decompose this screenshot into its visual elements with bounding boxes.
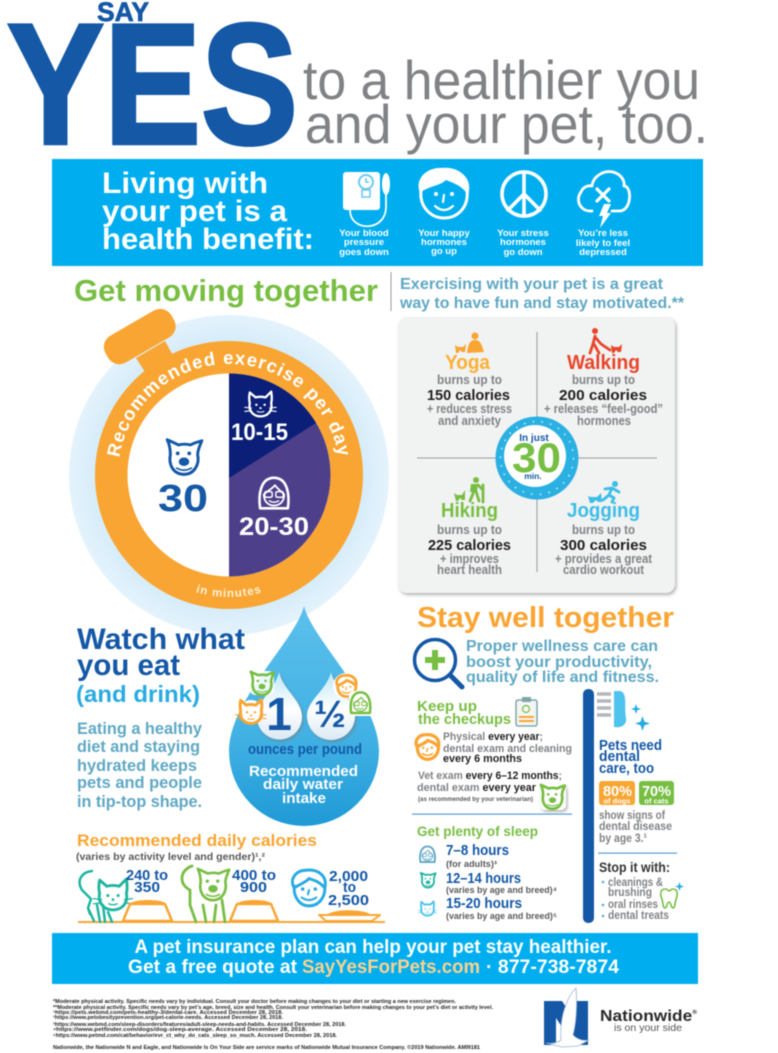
- footnotes: **Moderate physical activity. Specific needs vary by pet’s age, breed, size and health. Consult your veterinarian before making changes to your pet’s diet or activity level.: [53, 1005, 494, 1011]
- icon: cat badge: [236, 700, 266, 724]
- activity: hiking: [428, 477, 511, 577]
- stopwatch handle: [99, 304, 180, 380]
- benefit labels: Your blood: [339, 228, 389, 239]
- footnotes: *Moderate physical activity. Specific needs vary by individual. Consult your doctor before making changes to your diet or starting a new exercise regimen.: [53, 999, 457, 1005]
- sub-heading: pets need dental care: [599, 738, 662, 777]
- calories: person: [328, 868, 369, 909]
- activity: hiking: Hiking: [441, 500, 498, 522]
- sleep: adults: 7–8 hours: [446, 842, 509, 859]
- person value: [239, 478, 309, 541]
- water caption: daily water: [263, 776, 343, 793]
- sub-heading: keep up the checkups: [417, 698, 511, 728]
- text: pet checkups: [417, 770, 562, 803]
- title: line two: and your pet, too.: [305, 93, 708, 155]
- calories: dog: [232, 867, 276, 896]
- sleep: adults: (for adults)³: [446, 859, 497, 869]
- chart: exercise stopwatch: [68, 308, 390, 635]
- list: dental care: oral rinses: [608, 899, 658, 911]
- section: watch what you eat: [76, 623, 245, 811]
- icon: peace sign: [502, 172, 546, 216]
- benefit labels: pressure: [344, 237, 384, 248]
- activity: jogging: burns up to: [572, 522, 635, 537]
- stat: 80 percent of dogs: 80%: [603, 783, 632, 800]
- icon: yoga: [455, 332, 484, 353]
- dog value: 30: [158, 478, 208, 520]
- icon: person checkups: [416, 735, 439, 759]
- small drop: pets: [257, 672, 302, 740]
- activity: hiking: heart health: [437, 563, 502, 577]
- badge: in just 30 min: min.: [524, 471, 542, 481]
- activity: yoga: and anxiety: [438, 414, 501, 428]
- segment: cat: [229, 374, 316, 478]
- logo wordmark: Nationwide: [600, 1008, 685, 1025]
- illustration: cat with bowl: [80, 871, 172, 922]
- list: dental care: dental treats: [608, 910, 669, 922]
- text: human checkups: every 6 months: [443, 753, 522, 765]
- icon: jogging: [588, 481, 619, 503]
- footnotes: ⁵https://www.petmd.com/cat/behavior/evr_ct_why_do_cats_sleep_so_much. Accessed December 28, 2018.: [53, 1033, 338, 1039]
- person value: 20-30: [239, 513, 309, 541]
- heading: watch what you eat: you eat: [77, 649, 180, 682]
- sub-heading: pets need dental care: Pets need: [599, 738, 662, 754]
- diet paragraph: pets and people: [77, 773, 202, 792]
- panel: health benefits band: [52, 159, 703, 266]
- activity: walking: Walking: [567, 352, 640, 374]
- ring title: Recommended exercise per day: [106, 350, 349, 458]
- wellness intro: [466, 638, 659, 686]
- text: dental disease: dental disease: [599, 819, 672, 833]
- calories: person: 2,500: [328, 892, 369, 909]
- sleep: cats: (varies by age and breed)⁵: [446, 911, 557, 921]
- benefit labels: [339, 228, 630, 258]
- sleep: cats: 15-20 hours: [446, 895, 522, 912]
- title: line one: to a healthier you: [303, 49, 700, 111]
- section: stay well together: [412, 602, 684, 923]
- benefit labels: hormones: [500, 237, 546, 248]
- icon: woman badge: [349, 691, 373, 716]
- water caption: Recommended: [249, 763, 358, 780]
- diet paragraph: [77, 719, 203, 811]
- sleep: cats: [418, 895, 557, 921]
- footnotes: ²https://www.petobesityprevention.org/pet-calorie-needs. Accessed December 28, 2018.: [53, 1015, 284, 1021]
- activity: walking: [544, 328, 663, 428]
- icon: walking: [590, 328, 622, 353]
- sub-heading: get plenty of sleep: Get plenty of sleep: [417, 823, 538, 839]
- footnotes: ¹https://pets.webmd.com/pets-healthy-3/dental-care. Accessed December 28, 2018.: [53, 1010, 284, 1016]
- icon: storm cloud: [578, 172, 630, 228]
- water caption: [249, 763, 358, 807]
- activity: jogging: 300 calories: [560, 537, 647, 554]
- calories: cat: 350: [134, 879, 160, 896]
- heading: get moving together: Get moving together: [74, 273, 378, 308]
- stat: 70 percent of cats: 70%: [642, 783, 671, 800]
- wellness intro: quality of life and fitness.: [466, 669, 659, 686]
- icon: happy face: [419, 168, 469, 218]
- footnotes: [53, 999, 494, 1051]
- benefit labels: hormones: [421, 237, 467, 248]
- panel: 30 minute activities: [398, 317, 675, 593]
- heading: watch what you eat: Watch what: [77, 623, 245, 656]
- text: pet checkups: (as recommended by your veterinarian): [418, 796, 533, 803]
- text: dental disease: by age 3.¹: [599, 831, 647, 845]
- calories: cat: 240 to: [126, 867, 168, 884]
- badge: in just 30 min: 30: [512, 434, 561, 481]
- benefit labels: goes down: [339, 247, 389, 258]
- illustration: dog with bowl: [182, 866, 278, 922]
- badge: in just 30 min: [496, 416, 578, 500]
- infographic: water drop: [229, 606, 379, 826]
- stat: 70 percent of cats: of cats: [644, 796, 669, 806]
- cat value: 10-15: [231, 419, 288, 446]
- icon: blood pressure monitor: [343, 172, 390, 226]
- icon: clipboard: [516, 697, 537, 726]
- benefit labels: go up: [431, 246, 457, 257]
- activity: walking: + releases “feel-good”: [544, 402, 663, 416]
- sleep: adults: [420, 842, 509, 869]
- activity: jogging: + provides a great: [555, 552, 653, 566]
- sub-heading: stop it with: Stop it with:: [599, 860, 670, 875]
- list: dental care: [602, 877, 669, 922]
- segment: person: [229, 374, 330, 576]
- wellness intro: Proper wellness care can: [466, 638, 658, 655]
- benefits heading: [102, 167, 314, 256]
- activity: yoga: Yoga: [445, 352, 491, 374]
- section: recommended daily calories: [76, 831, 385, 923]
- cta: phone: · 877-738-7874: [486, 956, 619, 978]
- cta: quote text: Get a free quote at: [128, 956, 297, 978]
- heading: stay well together: Stay well together: [417, 602, 674, 634]
- stat: 80 percent of dogs: [599, 781, 635, 806]
- exercise intro text: Exercising with your pet is a great: [400, 276, 664, 293]
- calories: person: 2,000: [329, 868, 368, 885]
- stat: 70 percent of cats: [639, 781, 674, 806]
- stopwatch ring: [95, 341, 363, 609]
- activity: hiking: + improves: [440, 552, 499, 566]
- icon: dog checkups: [540, 784, 566, 810]
- activity: yoga: + reduces stress: [427, 402, 512, 416]
- sub-heading: keep up the checkups: the checkups: [418, 711, 511, 728]
- heading: watch what you eat: [76, 623, 245, 707]
- title: [7, 0, 708, 180]
- activity: yoga: burns up to: [437, 372, 502, 387]
- diet paragraph: in tip-top shape.: [77, 792, 202, 811]
- calories: person: to: [343, 879, 356, 896]
- icon: toothbrush: [583, 689, 650, 923]
- diet paragraph: hydrated keeps: [77, 756, 197, 775]
- calories: dog: 400 to: [232, 867, 276, 884]
- activity: walking: hormones: [577, 414, 631, 428]
- activity: walking: burns up to: [572, 372, 635, 387]
- activity: jogging: Jogging: [567, 500, 640, 522]
- benefits heading: your pet is a: [102, 195, 287, 228]
- icon: magnifier: [414, 640, 462, 687]
- illustration: person with plate: [292, 870, 380, 921]
- activity: jogging: [555, 481, 653, 577]
- dog value: [158, 440, 208, 520]
- cta: website: SayYesForPets.com: [302, 956, 480, 978]
- benefits heading: health benefit:: [102, 223, 314, 256]
- exercise intro text: way to have fun and stay motivated.**: [399, 295, 685, 312]
- logo: nationwide: [544, 988, 698, 1047]
- activity: walking: 200 calories: [559, 387, 647, 404]
- text: human checkups: dental exam and cleaning: [443, 743, 572, 755]
- list: dental care: brushing: [608, 887, 652, 899]
- cat value: [231, 392, 288, 446]
- badge: in just 30 min: In just: [519, 433, 549, 444]
- sub-heading: pets need dental care: dental: [599, 749, 640, 765]
- logo mark: [544, 988, 589, 1047]
- sub-heading: pets need dental care: care, too: [599, 761, 654, 777]
- small drop: pets: 1: [266, 688, 292, 740]
- wellness intro: boost your productivity,: [466, 654, 652, 671]
- sleep: dogs: 12–14 hours: [446, 870, 521, 887]
- logo wordmark: ®: [692, 1009, 698, 1016]
- text: pet checkups: Vet exam every 6–12 months;: [418, 770, 562, 782]
- call to action band: [52, 933, 698, 984]
- sub-heading: keep up the checkups: Keep up: [417, 698, 477, 715]
- stat: 80 percent of dogs: of dogs: [603, 796, 631, 806]
- icon: dog badge: [250, 671, 274, 695]
- icon: boy badge: [333, 673, 359, 699]
- small drop: people: ½: [314, 694, 346, 736]
- calories note: (varies by activity level and gender)¹,²: [76, 852, 266, 863]
- logo tagline: is on your side: [614, 1023, 682, 1034]
- calories heading: Recommended daily calories: [77, 831, 317, 850]
- text: pet checkups: dental exam every year: [417, 782, 537, 794]
- benefit labels: depressed: [579, 247, 627, 258]
- benefit labels: Your happy: [418, 228, 470, 239]
- text: dental disease: [599, 808, 672, 845]
- benefit labels: Your stress: [497, 228, 549, 239]
- water caption: intake: [282, 790, 326, 807]
- icon: tooth: [661, 882, 684, 908]
- sleep: dogs: (varies by age and breed)⁴: [446, 885, 557, 895]
- text: dental disease: show signs of: [599, 808, 666, 822]
- calories: cat: [126, 867, 168, 896]
- footnotes: Nationwide, the Nationwide N and Eagle, and Nationwide Is On Your Side are service marks of Nationwide Mutual Insurance Company. ©2019 Nationwide. AMI9181: [53, 1044, 480, 1051]
- activity: jogging: cardio workout: [563, 563, 645, 577]
- icon: hiking: [454, 477, 483, 502]
- benefits heading: Living with: [102, 167, 268, 200]
- footnotes: ³https://www.webmd.com/sleep-disorders/features/adult-sleep-needs-and-habits. Accessed December 28, 2018.: [53, 1022, 347, 1028]
- activity: yoga: 150 calories: [427, 387, 510, 404]
- text: human checkups: [443, 731, 572, 765]
- footnotes: ⁴https://www.petfinder.com/dogs/dog-sleep-average. Accessed December 28, 2018.: [53, 1027, 308, 1033]
- exercise intro text: [399, 276, 685, 312]
- activity: hiking: burns up to: [437, 522, 502, 537]
- activity: hiking: 225 calories: [428, 537, 511, 554]
- text: human checkups: Physical every year;: [443, 731, 543, 743]
- sleep: dogs: [421, 870, 557, 895]
- benefit labels: likely to feel: [576, 238, 630, 249]
- activity: yoga: [427, 332, 512, 428]
- list: dental care: cleanings &: [608, 877, 663, 889]
- heading: watch what you eat: (and drink): [76, 681, 200, 707]
- calories: dog: 900: [240, 879, 267, 896]
- call to action band: A pet insurance plan can help your pet stay healthier.: [134, 936, 612, 958]
- ring unit label: in minutes: [196, 584, 262, 598]
- water units: ounces per pound: [248, 741, 362, 758]
- small drop: people: [307, 672, 355, 740]
- diet paragraph: Eating a healthy: [77, 719, 203, 738]
- benefit labels: go down: [503, 247, 543, 258]
- benefit labels: You’re less: [578, 228, 628, 239]
- diet paragraph: diet and staying: [77, 737, 200, 756]
